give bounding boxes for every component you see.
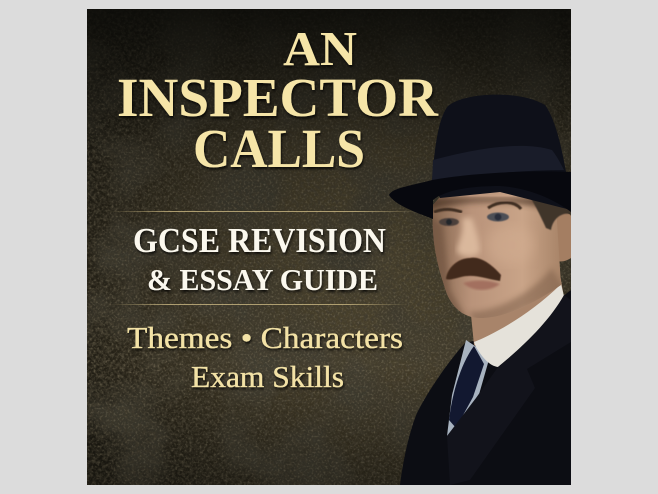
hat brim [389,171,571,219]
coat [400,290,571,485]
divider: lower [108,304,408,305]
collar [474,284,564,367]
subtitle [133,221,386,297]
tie [449,346,484,428]
lips [463,280,500,290]
nose [457,218,480,256]
moustache [446,258,501,281]
topics list [127,320,403,394]
face shading [433,196,561,318]
face [433,185,561,318]
title: INSPECTOR [117,67,439,128]
ear [556,213,571,262]
illustration: inspector portrait [389,95,571,485]
infographic cover [87,9,571,485]
hat crown [432,95,571,210]
title: CALLS [193,118,365,179]
divider: upper [108,211,418,212]
coat lapel [447,295,564,436]
topics list: Themes • Characters [127,320,403,355]
title [117,21,439,179]
shirt front [447,340,490,436]
hat band [432,146,564,182]
neck [471,275,563,346]
hair [531,200,571,230]
title: AN [283,21,357,76]
panel: textured dark background [87,9,571,485]
eyebrows [434,202,521,212]
topics list: Exam Skills [191,359,344,394]
subtitle: GCSE REVISION [133,221,386,260]
subtitle: & ESSAY GUIDE [147,262,378,297]
eyes [439,212,509,226]
